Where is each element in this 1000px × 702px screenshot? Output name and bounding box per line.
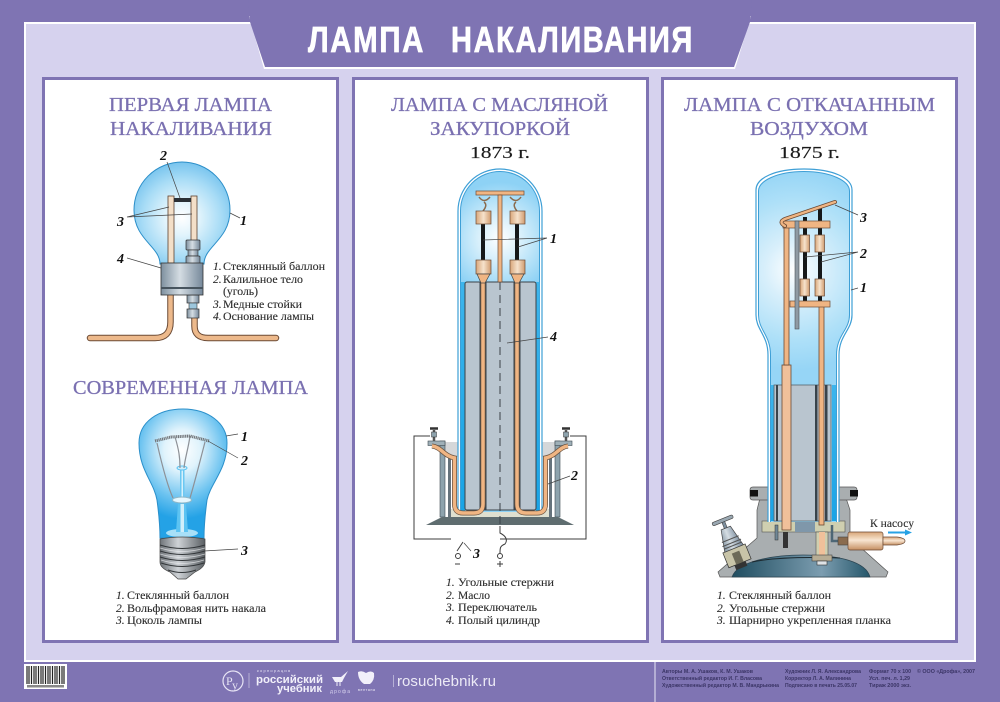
legend: evacuated lamp: 2.: [717, 603, 726, 615]
panel: first and modern lamp: [44, 78, 338, 642]
legend: first lamp: Основание лампы: [223, 311, 314, 323]
callouts: first lamp: 3: [116, 215, 124, 230]
legend: first lamp: 2.: [213, 274, 222, 286]
footer: imprint: Корректор Л. А. Малинина: [785, 676, 852, 682]
diagram: modern lamp: [139, 409, 227, 579]
heading: oil seal lamp: ЗАКУПОРКОЙ: [430, 117, 570, 140]
valve: [711, 514, 753, 572]
legend: oil seal lamp: Угольные стержни: [458, 577, 554, 589]
copper conductors: [432, 282, 568, 513]
callouts: first lamp: 1: [240, 214, 247, 229]
callouts: first lamp: [116, 149, 247, 268]
site address: rosuchebnik.ru: [397, 673, 496, 690]
footer: imprint: Художник Л. Я. Александрова: [785, 669, 862, 675]
hollow cylinder: [774, 385, 831, 521]
legend: modern lamp: 2.: [116, 603, 125, 615]
heading: evacuated lamp: [684, 94, 935, 162]
logo: Drofa: [330, 671, 350, 695]
callouts: modern lamp: 2: [240, 454, 248, 469]
diagram: evacuated lamp: [711, 169, 914, 577]
legend: oil seal lamp: Переключатель: [458, 602, 537, 614]
legend: oil seal lamp: [445, 577, 554, 627]
legend: first lamp: (уголь): [223, 286, 258, 298]
callouts: evacuated lamp: 2: [859, 247, 867, 262]
legend: evacuated lamp: [716, 590, 891, 627]
legend: oil seal lamp: 3.: [445, 602, 455, 614]
glass envelope: [458, 169, 542, 512]
circuit wiring: [414, 436, 586, 567]
footer: barcode: [24, 664, 67, 689]
footer: publisher logos: [223, 668, 496, 695]
legend: first lamp: 4.: [213, 311, 222, 323]
callouts: evacuated lamp: [805, 205, 867, 296]
heading: evacuated lamp: ВОЗДУХОМ: [750, 118, 868, 140]
dashed axis: [499, 282, 501, 526]
legend: evacuated lamp: 3.: [716, 615, 726, 627]
legend: first lamp: Медные стойки: [223, 299, 302, 311]
callouts: modern lamp: 3: [240, 544, 248, 559]
legend: first lamp: Калильное тело: [223, 274, 303, 286]
legend: evacuated lamp: 1.: [717, 590, 726, 602]
footer: imprint: Формат 70 х 100: [869, 669, 911, 675]
footer: imprint: Подписано в печать 25.05.07: [785, 683, 857, 689]
legend: first lamp: [212, 261, 325, 323]
title banner: ЛАМПА: [308, 19, 425, 60]
footer: imprint: Художественный редактор М. В. Мандрыкина: [662, 682, 780, 689]
logo: Drofa: дрофа: [330, 689, 350, 695]
legend: oil seal lamp: 2.: [446, 590, 455, 602]
callouts: evacuated lamp: 1: [860, 281, 867, 296]
arrow to pump: [888, 530, 912, 536]
callouts: first lamp: 2: [159, 149, 167, 164]
callouts: modern lamp: [204, 430, 248, 559]
callouts: oil seal lamp: 4: [549, 330, 557, 345]
legend: modern lamp: Стеклянный баллон: [127, 590, 229, 602]
legend: evacuated lamp: Шарнирно укрепленная планка: [729, 615, 891, 627]
pump tube: [832, 525, 905, 550]
dark rod channels: [480, 282, 520, 510]
heading: evacuated lamp: 1875 г.: [779, 143, 840, 162]
callouts: oil seal lamp: 1: [550, 232, 557, 247]
carbon rods and holders: [783, 208, 830, 329]
callouts: modern lamp: 1: [241, 430, 248, 445]
logo: Russian textbook: корпорация: [257, 668, 290, 673]
carbon rods and holders: [476, 191, 525, 283]
heading: modern lamp: СОВРЕМЕННАЯ ЛАМПА: [73, 377, 309, 399]
legend: modern lamp: 3.: [115, 615, 125, 627]
legend: modern lamp: Цоколь лампы: [127, 615, 202, 627]
footer: imprint: © ООО «Дрофа», 2007: [917, 668, 975, 675]
legend: evacuated lamp: Угольные стержни: [729, 603, 825, 615]
legend: first lamp: 3.: [212, 299, 222, 311]
panel: lamp with evacuated air: [662, 78, 956, 642]
hinged lever: [782, 202, 835, 226]
legend: oil seal lamp: 1.: [446, 577, 455, 589]
legend: oil seal lamp: 4.: [446, 615, 455, 627]
center stud: [812, 532, 832, 565]
footer: imprint: Тираж 2000 экз.: [869, 683, 911, 689]
footer: imprint: [655, 662, 975, 702]
panel: lamp with oil seal: [354, 78, 648, 642]
diagram: oil seal lamp: [414, 169, 586, 567]
callouts: oil seal lamp: [464, 232, 578, 562]
legend: modern lamp: 1.: [116, 590, 125, 602]
logo: Russian textbook: у: [232, 678, 238, 692]
legend: first lamp: 1.: [213, 261, 222, 273]
terminals: [430, 428, 570, 441]
heading: evacuated lamp: ЛАМПА С ОТКАЧАННЫМ: [684, 94, 935, 116]
copper rods: [782, 226, 824, 530]
logo: Ventana-Graf: [358, 671, 375, 692]
callouts: oil seal lamp: 2: [570, 469, 578, 484]
vacuum base: [718, 487, 888, 577]
legend: oil seal lamp: Полый цилиндр: [458, 615, 540, 627]
title banner: [248, 0, 752, 69]
legend: evacuated lamp: Стеклянный баллон: [729, 590, 831, 602]
oil cup: [426, 441, 574, 525]
heading: oil seal lamp: [391, 93, 608, 162]
footer: imprint: Усл. печ. л. 1,29: [869, 676, 910, 682]
legend: modern lamp: [115, 590, 266, 627]
callouts: first lamp: 4: [116, 252, 124, 267]
heading: first lamp: НАКАЛИВАНИЯ: [110, 118, 272, 140]
callouts: evacuated lamp: 3: [859, 211, 867, 226]
footer: imprint: Ответственный редактор И. Г. Власова: [662, 675, 763, 682]
glass envelope: [756, 169, 852, 522]
heading: oil seal lamp: 1873 г.: [470, 143, 530, 162]
hollow cylinder: [465, 282, 536, 510]
logo: Russian textbook: [223, 668, 323, 695]
diagram: first lamp: [90, 162, 276, 338]
heading: first lamp: [109, 94, 273, 140]
heading: first lamp: ПЕРВАЯ ЛАМПА: [109, 94, 273, 116]
callouts: oil seal lamp: 3: [472, 547, 480, 562]
logo: Russian textbook: российский: [256, 674, 323, 686]
logo: Russian textbook: Р: [226, 674, 233, 688]
legend: oil seal lamp: Масло: [458, 590, 490, 602]
logo: Ventana-Graf: вентана: [358, 688, 375, 692]
logo: Russian textbook: учебник: [277, 683, 322, 695]
title banner: НАКАЛИВАНИЯ: [451, 19, 694, 60]
heading: oil seal lamp: ЛАМПА С МАСЛЯНОЙ: [391, 93, 608, 116]
legend: modern lamp: Вольфрамовая нить накала: [127, 603, 266, 615]
legend: first lamp: Стеклянный баллон: [223, 261, 325, 273]
label: to pump: К насосу: [870, 518, 914, 530]
footer: imprint: Авторы М. А. Ушаков, К. М. Ушаков: [662, 669, 754, 675]
